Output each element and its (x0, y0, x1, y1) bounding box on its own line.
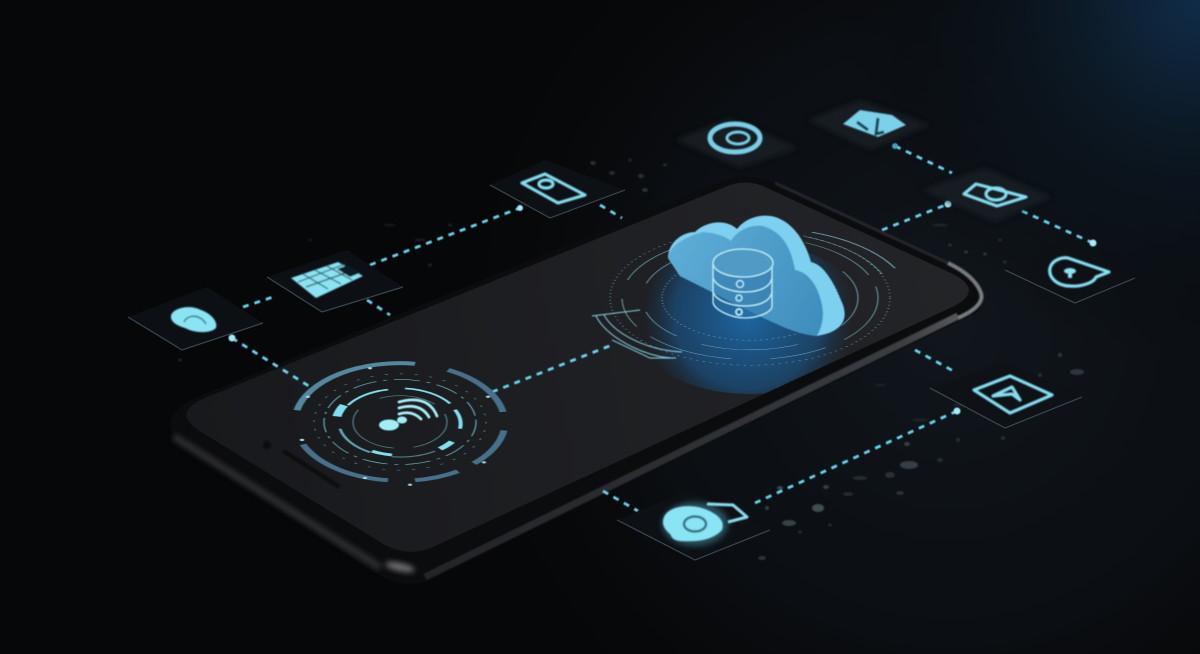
connector lines (228, 143, 1096, 511)
tile: bottom gauge (617, 490, 770, 560)
speaker and camera slots (263, 441, 338, 486)
tile: camera (922, 168, 1052, 222)
small arc bracket left of cloud (592, 310, 682, 358)
icon: paper plane frame (974, 376, 1052, 413)
database cylinder (713, 249, 773, 318)
tile: face (128, 287, 263, 350)
phone body (170, 177, 982, 584)
outer segmented ring (297, 363, 504, 480)
cloud front (668, 226, 823, 336)
icon: lock (1050, 258, 1109, 286)
icon: bubble with lens (662, 502, 747, 546)
cloud back (668, 216, 845, 336)
tile: phone (490, 160, 625, 218)
icon: face (171, 307, 216, 332)
bottom highlight (384, 560, 416, 574)
hub nodes (300, 367, 490, 486)
top right rim (775, 183, 948, 263)
icon: gauge badge (710, 124, 760, 152)
wifi hub on screen (297, 363, 504, 486)
inner rings (314, 374, 486, 470)
cloud hub rings (610, 231, 895, 365)
icon: table grid (291, 262, 363, 298)
tile: send (930, 362, 1082, 428)
icon: picture (843, 110, 906, 137)
scattered data particles (178, 158, 1084, 560)
glow under cloud (648, 252, 847, 394)
icon: camera (964, 184, 1026, 206)
tile: lock (1005, 245, 1135, 303)
phone screen (187, 182, 969, 552)
tile: gauge (675, 118, 798, 168)
icon: phone frame (522, 174, 585, 203)
corner highlight (948, 263, 982, 318)
cloud storage icon (668, 216, 845, 336)
lower right rim (425, 316, 958, 577)
left rim (176, 438, 378, 566)
icon: wifi waves (379, 400, 437, 430)
tile: mountain (808, 100, 930, 150)
tile: table (267, 250, 403, 312)
